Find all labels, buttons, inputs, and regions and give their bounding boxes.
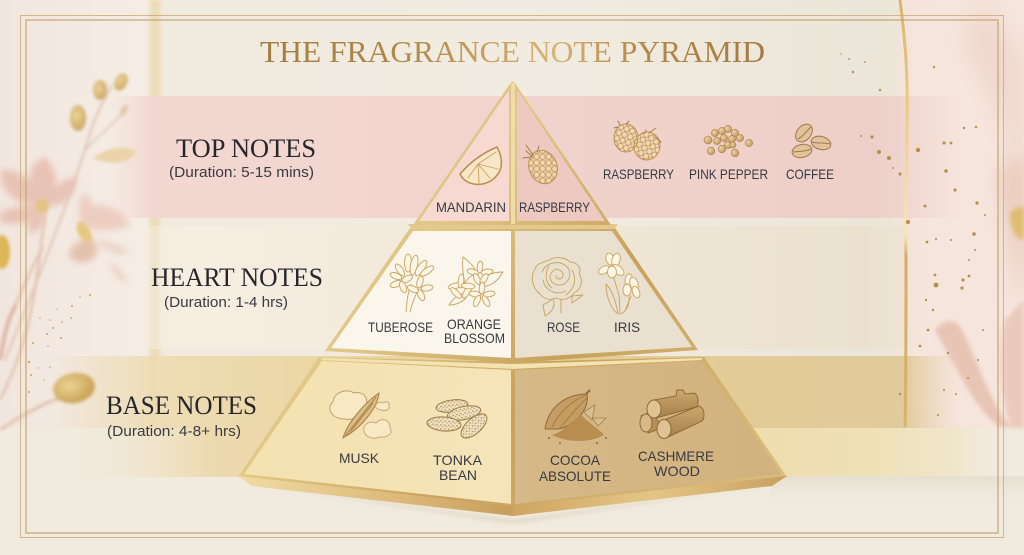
duration: heart notes: (Duration: 1-4 hrs)	[164, 295, 288, 311]
label: raspberry in pyramid: RASPBERRY	[519, 199, 591, 215]
label: tonka bean: TONKA	[433, 452, 483, 468]
icon: musk pod and clouds	[330, 391, 391, 438]
band: floor-level gold strip right	[700, 428, 1005, 476]
label: cocoa absolute: COCOA	[550, 452, 601, 468]
base tier right face	[515, 361, 781, 504]
background: cream wall	[0, 0, 1024, 430]
top tier right face	[517, 90, 605, 221]
label: orange blossom: ORANGE	[447, 316, 501, 332]
icon: cashmere wood logs	[640, 390, 704, 438]
base tier right lip	[513, 476, 787, 516]
band: floor-level gold strip left	[60, 428, 340, 477]
icon: iris	[597, 252, 641, 314]
heart tier left face	[331, 231, 511, 358]
label: raspberry: RASPBERRY	[603, 166, 675, 182]
icon: rose	[532, 258, 583, 316]
top tier base plate	[408, 224, 618, 229]
decoration: gold dust at left	[28, 294, 91, 393]
heading: top notes	[169, 133, 316, 181]
icon: mandarin slice	[460, 147, 501, 184]
label: cocoa absolute	[539, 452, 611, 484]
label: cocoa absolute: ABSOLUTE	[539, 468, 611, 484]
icon: cocoa pod and powder	[545, 390, 607, 444]
decoration: gold dust at right	[840, 53, 986, 416]
heart tier right face	[515, 231, 692, 358]
label: cashmere wood: WOOD	[654, 463, 700, 479]
background: floor	[0, 428, 1024, 555]
label: tonka bean	[433, 452, 483, 483]
label: cashmere wood: CASHMERE	[638, 448, 714, 464]
top tier frame	[413, 81, 611, 225]
heading: heart notes	[151, 262, 323, 311]
top tier center seam	[511, 83, 515, 224]
decoration: blurred flowers at left	[0, 71, 137, 430]
icon: pink pepper	[704, 125, 753, 157]
band: top notes	[110, 96, 960, 218]
label: orange blossom: BLOSSOM	[444, 330, 505, 346]
pyramid: heart tier	[325, 228, 698, 363]
band: heart notes	[110, 226, 930, 349]
heart tier frame	[325, 228, 698, 363]
duration: base notes: (Duration: 4-8+ hrs)	[107, 424, 241, 440]
decoration: curved gold line right	[900, 0, 907, 427]
label: mandarin: MANDARIN	[436, 199, 506, 215]
label: iris: IRIS	[614, 319, 640, 335]
icon: raspberry in pyramid	[523, 145, 562, 188]
background: right silk drape	[908, 0, 1024, 430]
background: silk fold bottom right	[935, 206, 1024, 428]
icon: coffee beans	[791, 121, 832, 159]
label: musk: MUSK	[339, 450, 380, 466]
band: base notes	[50, 356, 960, 428]
background: left vertical gold column	[150, 0, 160, 430]
label: cashmere wood	[638, 448, 714, 479]
background: floor shadow	[770, 476, 1024, 508]
label: tonka bean: BEAN	[439, 467, 477, 483]
base tier left lip	[238, 476, 513, 516]
label: orange blossom	[444, 316, 505, 346]
icon: tuberose	[389, 254, 435, 312]
heading text: heart notes: HEART NOTES	[151, 262, 323, 292]
label: rose: ROSE	[547, 319, 580, 335]
heading text: top notes: TOP NOTES	[176, 133, 316, 163]
top tier left face	[419, 90, 509, 221]
icon: orange blossom	[448, 257, 503, 308]
heading text: base notes: BASE NOTES	[106, 390, 257, 420]
icon: tonka beans	[427, 398, 491, 442]
icon: raspberries	[614, 121, 663, 163]
base tier left face	[244, 361, 511, 504]
title: THE FRAGRANCE NOTE PYRAMID	[260, 34, 765, 69]
pyramid: top tier	[408, 81, 618, 229]
heading: base notes	[106, 390, 257, 440]
base tier frame	[238, 357, 787, 516]
pyramid: base tier	[238, 357, 787, 516]
pyramid shadow	[250, 484, 775, 524]
label: pink pepper: PINK PEPPER	[689, 166, 768, 182]
label: coffee: COFFEE	[786, 166, 834, 182]
label: tuberose: TUBEROSE	[368, 319, 433, 335]
duration: top notes: (Duration: 5-15 mins)	[169, 165, 314, 181]
base tier top bevel	[321, 358, 703, 369]
